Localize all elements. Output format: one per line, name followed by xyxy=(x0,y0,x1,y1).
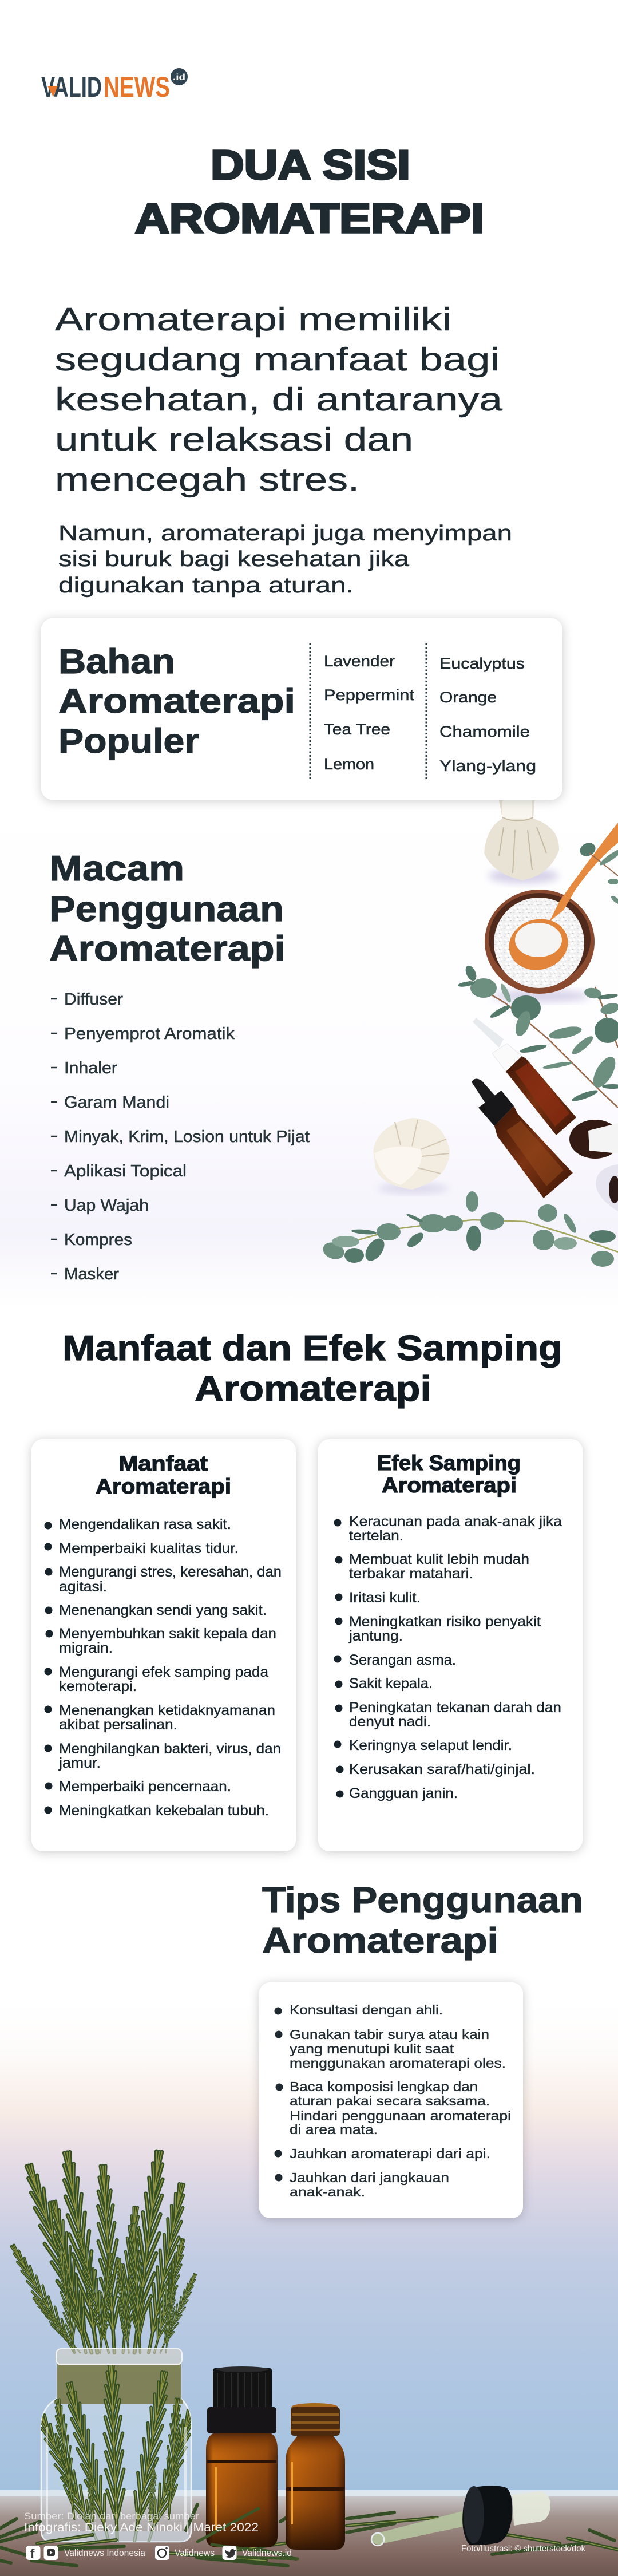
intro paragraph: kesehatan, di antaranya xyxy=(55,381,502,418)
list: manfaat: akibat persalinan. xyxy=(59,1717,177,1733)
icon: facebook xyxy=(26,2546,40,2561)
list: tips: Hindari penggunaan aromaterapi xyxy=(290,2108,511,2123)
icon: bottom right item xyxy=(596,1164,618,1211)
heading: bahan aromaterapi populer: Populer xyxy=(58,722,199,760)
icon: wooden spoon xyxy=(503,823,618,977)
heading: macam penggunaan aromaterapi: Macam xyxy=(49,849,184,888)
panel: manfaat aromaterapi xyxy=(31,1439,296,1851)
list: manfaat: agitasi. xyxy=(59,1579,107,1595)
list: manfaat: Mengurangi efek samping pada xyxy=(59,1664,268,1680)
intro paragraph: mencegah stres. xyxy=(55,461,359,498)
list: ingredients column 1 xyxy=(324,653,415,773)
photo: rosemary and essential oil bottles xyxy=(0,2062,618,2576)
heading: tips penggunaan aromaterapi xyxy=(262,1880,583,1961)
panel: efek samping aromaterapi xyxy=(318,1439,583,1851)
list: macam penggunaan: Minyak, Krim, Losion untuk Pijat xyxy=(64,1128,310,1146)
heading: bahan aromaterapi populer: Aromaterapi xyxy=(58,682,295,720)
list: manfaat: Menyembuhkan sakit kepala dan xyxy=(59,1626,276,1642)
secondary paragraph: Namun, aromaterapi juga menyimpan xyxy=(58,521,512,546)
list: efek samping: Membuat kulit lebih mudah xyxy=(349,1551,529,1567)
list: ingredients column 2: Eucalyptus xyxy=(439,655,525,672)
list: ingredients column 2: Orange xyxy=(439,689,497,706)
panel heading: manfaat: Aromaterapi xyxy=(96,1475,231,1498)
panel heading: efek samping: Efek Samping xyxy=(377,1451,521,1475)
list: efek samping: Iritasi kulit. xyxy=(349,1590,421,1606)
icon: eucalyptus branch bottom xyxy=(320,1191,618,1267)
heading: manfaat dan efek samping: Aromaterapi xyxy=(195,1369,431,1409)
list: manfaat: Menenangkan ketidaknyamanan xyxy=(59,1702,275,1718)
list: tips: Jauhkan aromaterapi dari api. xyxy=(290,2146,490,2161)
logo: Validnews.id: VALID xyxy=(41,71,102,103)
list: efek samping: Keringnya selaput lendir. xyxy=(349,1737,512,1753)
footer source credits xyxy=(24,2511,259,2534)
icon: bottle with white cap xyxy=(473,1018,576,1135)
list: efek samping: jantung. xyxy=(348,1628,403,1644)
intro paragraph: untuk relaksasi dan xyxy=(55,421,413,458)
icon: facebook: f xyxy=(30,2546,35,2561)
list: efek samping: Kerusakan saraf/hati/ginjal. xyxy=(349,1761,535,1777)
icon: eucalyptus branch middle xyxy=(458,840,618,1108)
list: manfaat: jamur. xyxy=(58,1755,101,1771)
list: tips: di area mata. xyxy=(290,2122,378,2137)
heading: bahan aromaterapi populer xyxy=(58,642,295,760)
list: ingredients column 1: Lavender xyxy=(324,653,395,670)
list: tips: Gunakan tabir surya atau kain xyxy=(290,2027,489,2042)
icon: dropper on table xyxy=(371,2486,550,2546)
list: macam penggunaan: Masker xyxy=(64,1265,119,1283)
social: validnews indonesia: Validnews Indonesia xyxy=(64,2547,145,2558)
icon: table rosemary sprigs xyxy=(0,2504,618,2566)
logo: Validnews.id xyxy=(41,68,188,103)
icon: wooden bowl with salt xyxy=(485,890,595,1002)
list: efek samping: tertelan. xyxy=(349,1528,403,1544)
bullets: manfaat xyxy=(45,1522,53,1814)
list: ingredients column 1: Lemon xyxy=(324,756,374,773)
logo: Validnews.id: .id xyxy=(173,73,185,82)
footer source credits: Sumber: Diolah dari berbagai sumber xyxy=(24,2511,199,2522)
list: tips: anak-anak. xyxy=(290,2184,365,2199)
list: macam penggunaan: Kompres xyxy=(64,1231,132,1249)
bullets: tips xyxy=(275,2007,283,2181)
list: manfaat: Menghilangkan bakteri, virus, dan xyxy=(59,1741,281,1757)
heading: macam penggunaan aromaterapi: Penggunaan xyxy=(49,890,284,929)
icon: instagram xyxy=(155,2546,169,2560)
list: efek samping: terbakar matahari. xyxy=(349,1566,473,1582)
list: tips: aturan pakai secara saksama. xyxy=(290,2093,490,2108)
title: AROMATERAPI xyxy=(135,196,484,242)
icon: dark dropper bottle xyxy=(472,1078,573,1198)
heading: manfaat dan efek samping: Manfaat dan Efek Samping xyxy=(62,1329,562,1368)
title xyxy=(135,143,484,242)
intro paragraph: Aromaterapi memiliki xyxy=(55,301,451,338)
heading: tips penggunaan aromaterapi: Aromaterapi xyxy=(262,1921,498,1961)
list: efek samping: denyut nadi. xyxy=(349,1714,431,1730)
panel: bahan aromaterapi populer xyxy=(41,618,562,800)
list: efek samping: Peningkatan tekanan darah dan xyxy=(349,1700,561,1716)
list: efek samping: Serangan asma. xyxy=(349,1652,456,1668)
logo: Validnews.id: NEWS xyxy=(104,71,170,103)
icon: youtube xyxy=(43,2546,58,2560)
heading: manfaat dan efek samping xyxy=(62,1329,562,1409)
list: manfaat: Mengurangi stres, keresahan, dan xyxy=(59,1564,282,1580)
list: macam penggunaan: Garam Mandi xyxy=(64,1093,169,1112)
secondary paragraph: sisi buruk bagi kesehatan jika xyxy=(58,547,410,571)
social: validnews.id: Validnews.id xyxy=(242,2547,292,2558)
list: macam penggunaan: Aplikasi Topical xyxy=(64,1162,187,1180)
social: validnews: Validnews xyxy=(175,2547,215,2558)
icon: rosemary sprigs in jar xyxy=(7,2150,199,2356)
list: ingredients column 1: Peppermint xyxy=(324,686,415,704)
list: tips: menggunakan aromaterapi oles. xyxy=(290,2056,506,2071)
list: ingredients column 2: Chamomile xyxy=(439,723,530,740)
heading: macam penggunaan aromaterapi: Aromaterapi xyxy=(49,929,286,969)
list: manfaat: Memperbaiki pencernaan. xyxy=(59,1779,231,1795)
list: manfaat: kemoterapi. xyxy=(59,1678,137,1694)
list: tips: Baca komposisi lengkap dan xyxy=(290,2079,478,2094)
list: macam penggunaan: Penyemprot Aromatik xyxy=(64,1025,235,1043)
footer source credits: Infografis: Dieky Ade Ninoki | Maret 2022 xyxy=(24,2521,259,2534)
list: tips: yang menutupi kulit saat xyxy=(290,2041,454,2056)
photo credit: Foto/Ilustrasi: © shutterstock/dok xyxy=(461,2544,586,2554)
photo: aromatherapy flat lay background xyxy=(0,800,618,1307)
heading: bahan aromaterapi populer: Bahan xyxy=(58,642,175,681)
intro paragraph xyxy=(55,301,502,498)
list: macam penggunaan: Diffuser xyxy=(64,990,123,1009)
list: efek samping: Meningkatkan risiko penyakit xyxy=(349,1614,541,1630)
panel: tips xyxy=(259,1982,523,2218)
heading: macam penggunaan aromaterapi xyxy=(49,849,286,969)
list: manfaat: Mengendalikan rasa sakit. xyxy=(59,1516,231,1532)
list: manfaat: Memperbaiki kualitas tidur. xyxy=(59,1540,239,1556)
list: manfaat: Menenangkan sendi yang sakit. xyxy=(59,1602,267,1618)
secondary paragraph: digunakan tanpa aturan. xyxy=(58,574,354,598)
list: manfaat xyxy=(58,1516,282,1819)
list: ingredients column 1: Tea Tree xyxy=(324,721,390,738)
list: efek samping: Keracunan pada anak-anak jika xyxy=(349,1514,562,1530)
list: macam penggunaan xyxy=(51,990,310,1283)
list: efek samping: Gangguan janin. xyxy=(349,1785,458,1801)
icon: large amber bottle xyxy=(206,2366,278,2547)
list: macam penggunaan: Uap Wajah xyxy=(64,1196,149,1215)
list: efek samping xyxy=(348,1514,562,1801)
list: tips: Jauhkan dari jangkauan xyxy=(290,2170,449,2185)
list: ingredients column 2 xyxy=(439,655,536,775)
intro paragraph: segudang manfaat bagi xyxy=(55,341,500,378)
list: tips: Konsultasi dengan ahli. xyxy=(290,2002,443,2017)
list: macam penggunaan: Inhaler xyxy=(64,1059,117,1077)
icon: twitter xyxy=(222,2546,237,2560)
list: efek samping: Sakit kepala. xyxy=(349,1676,433,1692)
icon: glass jar xyxy=(40,2348,192,2543)
list: manfaat: Meningkatkan kekebalan tubuh. xyxy=(59,1803,269,1819)
icon: herbal compress top xyxy=(484,800,559,883)
list: ingredients column 2: Ylang-ylang xyxy=(439,757,536,775)
panel heading: manfaat xyxy=(96,1452,231,1498)
icon: small amber bottle xyxy=(286,2403,345,2550)
secondary paragraph xyxy=(58,521,512,598)
list: tips xyxy=(290,2002,511,2199)
bullets: efek samping xyxy=(334,1519,343,1797)
list: manfaat: migrain. xyxy=(59,1640,113,1656)
panel heading: manfaat: Manfaat xyxy=(118,1452,208,1475)
icon: table sprigs over bottles xyxy=(197,2508,298,2559)
title: DUA SISI xyxy=(211,143,410,188)
panel heading: efek samping: Aromaterapi xyxy=(382,1473,517,1497)
icon: far right bottle xyxy=(569,1120,618,1159)
panel heading: efek samping xyxy=(377,1451,521,1497)
icon: herbal compress round xyxy=(373,1118,450,1194)
heading: tips penggunaan aromaterapi: Tips Penggunaan xyxy=(262,1880,583,1920)
